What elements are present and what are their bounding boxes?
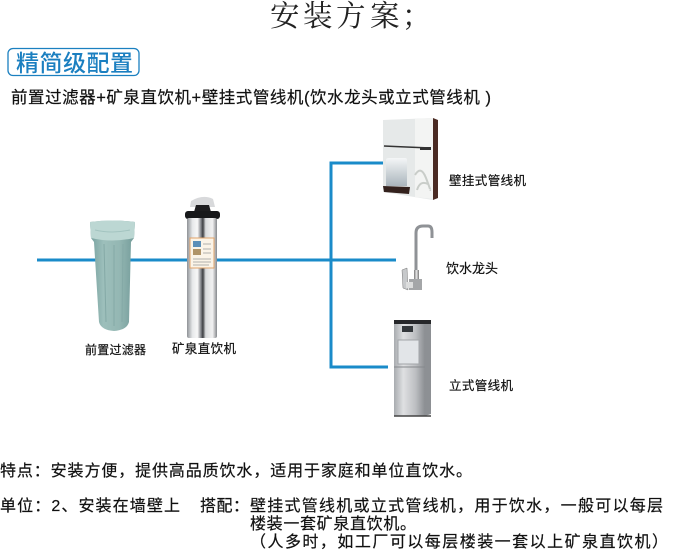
text block: installation and pairing [0, 496, 668, 550]
icon: mineral water purifier [185, 197, 220, 338]
badge: configuration level: 精简级配置 [16, 50, 133, 76]
text block: features: 特点：安装方便，提供高品质饮水，适用于家庭和单位直饮水。 [0, 462, 472, 480]
icon: pre-filter [90, 220, 135, 331]
icon: drinking faucet [402, 226, 432, 290]
text block: installation and pairing: 单位：2、安装在墙壁上 [0, 496, 180, 515]
water pipes [37, 163, 396, 367]
subtitle: system composition: 前置过滤器+矿泉直饮机+壁挂式管线机(饮水龙头或立式管线机 ) [11, 88, 491, 107]
icon: wall-mounted dispenser [383, 118, 438, 200]
text block: installation and pairing: 搭配： [200, 497, 249, 515]
label: floor-standing dispenser: 立式管线机 [449, 378, 513, 393]
title: 安装方案； [270, 0, 432, 33]
icon: floor-standing dispenser [394, 320, 431, 416]
label: drinking faucet: 饮水龙头 [446, 261, 498, 276]
label: pre-filter: 前置过滤器 [85, 342, 146, 357]
text block: installation and pairing: 壁挂式管线机或立式管线机，用于饮水，一般可以每层 [250, 496, 663, 515]
label: wall-mounted dispenser: 壁挂式管线机 [449, 173, 526, 188]
text block: installation and pairing: 楼装一套矿泉直饮机。 [250, 515, 416, 533]
label: mineral water purifier: 矿泉直饮机 [172, 341, 236, 356]
